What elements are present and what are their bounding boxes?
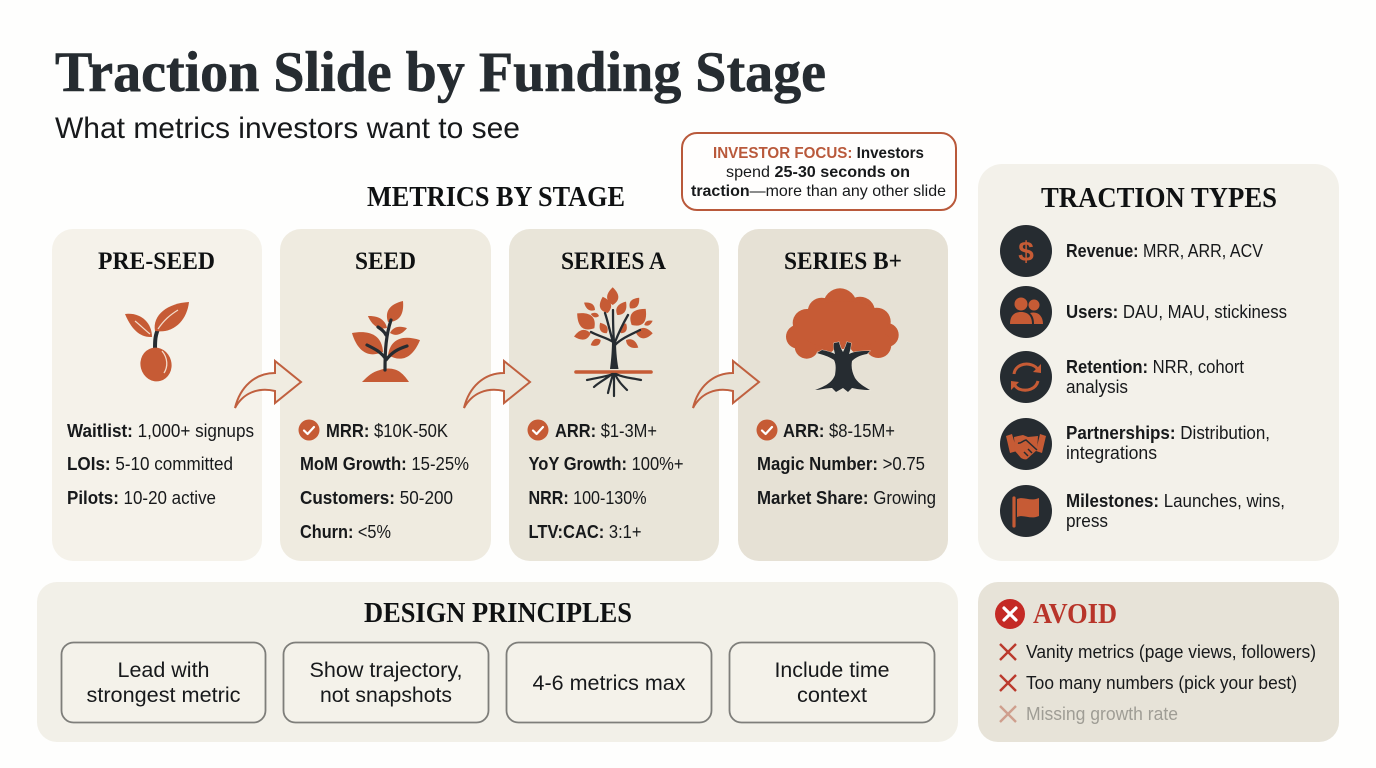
- icon: rooted tree: [572, 287, 654, 396]
- callout: investor focus: INVESTOR FOCUS: Investors: [713, 145, 924, 162]
- item: partnerships: integrations: [1066, 443, 1157, 463]
- avoid item: missing growth rate: Missing growth rate: [1026, 704, 1178, 724]
- seed metrics: MRR: $10K-50K: [326, 421, 448, 441]
- item: milestones: press: [1066, 511, 1108, 531]
- series a metrics: ARR: $1-3M+: [555, 421, 657, 441]
- seed metrics: Customers: 50-200: [300, 488, 453, 508]
- item: retention: [1000, 351, 1244, 403]
- item: revenue: Revenue: MRR, ARR, ACV: [1066, 241, 1263, 261]
- traction types heading: TRACTION TYPES: [1041, 182, 1277, 214]
- arrow: series a to series b+: [693, 361, 759, 408]
- subtitle: What metrics investors want to see: [55, 112, 520, 145]
- item: retention: analysis: [1066, 377, 1128, 397]
- arrow: seed to series a: [464, 361, 530, 408]
- pre-seed metrics: LOIs: 5-10 committed: [67, 454, 233, 474]
- item: users: [1000, 286, 1287, 338]
- item: users: Users: DAU, MAU, stickiness: [1066, 302, 1287, 322]
- icon: mature tree: [786, 288, 899, 392]
- series b+ metrics: Market Share: Growing: [757, 488, 936, 508]
- principle: lead with strongest metric: [62, 642, 266, 722]
- principle: time context: context: [797, 684, 867, 707]
- panel: series b+: [738, 229, 948, 561]
- principle: show trajectory: [284, 642, 488, 722]
- series a metrics: YoY Growth: 100%+: [528, 454, 684, 474]
- check icon: [756, 420, 778, 440]
- pre-seed heading: PRE-SEED: [98, 248, 215, 275]
- avoid item: vanity metrics: Vanity metrics (page views, followers): [1026, 642, 1316, 662]
- panel: pre-seed: [52, 229, 262, 561]
- avoid item: too many numbers: Too many numbers (pick your best): [1026, 673, 1297, 693]
- panel: traction types: [978, 164, 1339, 561]
- check icon: [528, 420, 548, 440]
- principle: time context: [730, 642, 934, 722]
- principle: time context: Include time: [774, 659, 890, 682]
- item: partnerships: Partnerships: Distribution,: [1066, 423, 1270, 443]
- item: milestones: [1000, 485, 1285, 537]
- arrow: pre-seed to seed: [235, 361, 301, 408]
- check icon: [298, 420, 320, 440]
- principle: show trajectory: Show trajectory,: [310, 659, 462, 682]
- callout: investor focus: [682, 133, 956, 210]
- item: revenue: $: [1018, 236, 1034, 267]
- series b+ metrics: [757, 421, 936, 508]
- seed metrics: [300, 421, 469, 542]
- callout: investor focus: spend 25-30 seconds on: [726, 164, 910, 181]
- series a metrics: LTV:CAC: 3:1+: [528, 522, 642, 542]
- principle: lead with strongest metric: Lead with: [118, 659, 210, 682]
- icon: red x circle: [995, 599, 1025, 629]
- series a metrics: [528, 421, 684, 542]
- series a metrics: NRR: 100-130%: [528, 488, 646, 508]
- pre-seed metrics: Pilots: 10-20 active: [67, 488, 216, 508]
- panel: avoid: [978, 582, 1339, 742]
- principle: show trajectory: not snapshots: [320, 684, 452, 707]
- series a heading: SERIES A: [561, 248, 666, 275]
- title: Traction Slide by Funding Stage: [55, 41, 826, 104]
- principle: metrics max: 4-6 metrics max: [532, 672, 686, 695]
- heading: metrics by stage: METRICS BY STAGE: [367, 182, 625, 213]
- seed heading: SEED: [355, 248, 416, 275]
- callout: investor focus: traction—more than any other slide: [691, 183, 946, 200]
- icon: seedling: [347, 297, 424, 382]
- seed metrics: Churn: <5%: [300, 522, 391, 542]
- panel: design principles: [37, 582, 958, 742]
- series b+ metrics: Magic Number: >0.75: [757, 454, 925, 474]
- pre-seed metrics: Waitlist: 1,000+ signups: [67, 421, 254, 441]
- pre-seed metrics: [67, 421, 254, 508]
- avoid heading: AVOID: [1033, 599, 1117, 630]
- principle: metrics max: [506, 642, 712, 722]
- panel: series a: [509, 229, 719, 561]
- series b+ heading: SERIES B+: [784, 248, 902, 275]
- seed metrics: MoM Growth: 15-25%: [300, 454, 469, 474]
- principle: lead with strongest metric: strongest metric: [86, 684, 240, 707]
- design principles heading: DESIGN PRINCIPLES: [364, 598, 632, 629]
- item: partnerships: [1000, 418, 1270, 470]
- item: retention: Retention: NRR, cohort: [1066, 357, 1244, 377]
- item: milestones: Milestones: Launches, wins,: [1066, 491, 1285, 511]
- series b+ metrics: ARR: $8-15M+: [783, 421, 895, 441]
- panel: seed: [280, 229, 491, 561]
- icon: sprouting seed: [125, 302, 189, 385]
- item: revenue: [1000, 225, 1263, 277]
